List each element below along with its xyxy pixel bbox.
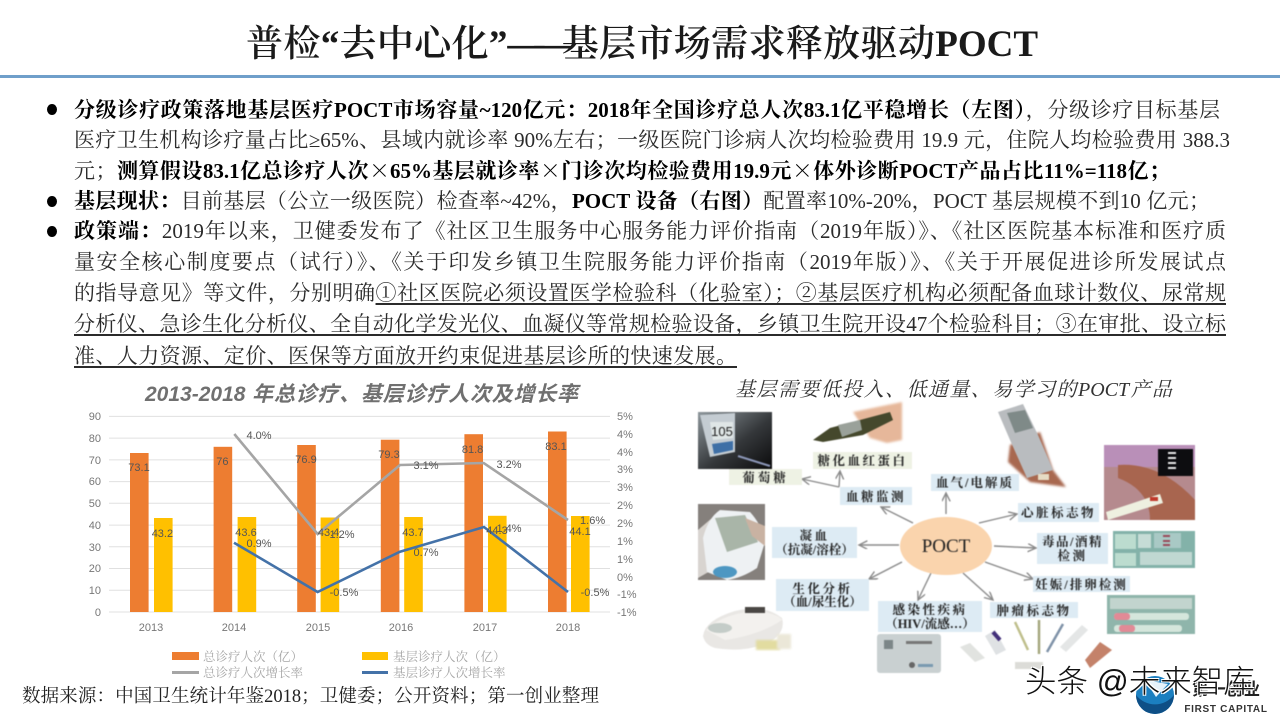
blue line: primary care growth rate: [234, 527, 568, 592]
left axis labels: 90: [89, 411, 101, 423]
photo: drug test strips: [1113, 531, 1195, 568]
photo: tumor marker strips: [960, 620, 1112, 669]
label: cardiac markers: [1018, 503, 1099, 522]
label: glucose: [729, 469, 802, 485]
left axis labels: [89, 411, 101, 619]
watermark: 头条 @未来智库: [1025, 663, 1255, 699]
bullet 1: [47, 104, 57, 115]
x axis labels: 2018: [556, 622, 580, 634]
diagram title: 基层需要低投入、低通量、易学习的POCT产品: [735, 379, 1172, 401]
left axis labels: 20: [89, 563, 101, 575]
photo: coagulation meter: [698, 504, 765, 580]
data labels: 76.9: [295, 454, 317, 466]
photo: infectious disease test card: [877, 634, 941, 673]
data labels: -0.5%: [330, 587, 359, 599]
right axis labels: 3%: [617, 482, 633, 494]
photo: blood gas analyzer: [998, 404, 1066, 487]
bullet 1 line 1: 分级诊疗政策落地基层医疗POCT市场容量~120亿元：2018年全国诊疗总人次83.1亿平稳增长（左图），分级诊疗目标基层: [74, 98, 1220, 122]
logo: First Capital: 第一创业: [1192, 675, 1260, 700]
bullet 3: [47, 226, 57, 237]
right axis labels: -1%: [617, 589, 637, 601]
data labels: 0.7%: [413, 547, 439, 559]
label: biochemistry: （血/尿生化）: [783, 594, 862, 609]
title rule: [0, 75, 1280, 78]
left axis labels: 80: [89, 433, 101, 445]
text block: policy bullets: [47, 98, 1230, 368]
data labels: 43.6: [235, 527, 257, 539]
x axis labels: 2015: [306, 622, 330, 634]
left axis labels: 50: [89, 498, 101, 510]
bullet 2: [47, 196, 57, 207]
hub: POCT oval: [900, 517, 992, 575]
data labels: 83.1: [545, 441, 567, 453]
data labels: 1.6%: [580, 515, 605, 527]
right axis labels: 2%: [617, 500, 633, 512]
yellow bars: primary care visits: [154, 516, 590, 612]
data labels: 73.1: [128, 462, 150, 474]
label: coagulation: [772, 527, 857, 558]
photo: glucose meter: 105: [711, 424, 733, 439]
data labels: -0.5%: [581, 587, 610, 599]
right axis labels: 5%: [617, 411, 633, 423]
data labels: 43.7: [402, 527, 424, 539]
x axis labels: 2014: [222, 622, 246, 634]
title: 普检“去中心化”——基层市场需求释放驱动POCT: [246, 24, 1038, 65]
chart legend: 总诊疗人次增长率: [203, 665, 304, 680]
x axis labels: 2016: [389, 622, 413, 634]
data labels: 3.2%: [496, 459, 522, 471]
photo: biochemistry analyzer: [703, 607, 791, 650]
arrows from POCT hub: [802, 471, 1036, 600]
photo: cardiac marker test: [1104, 445, 1195, 520]
chart title: 2013-2018 年总诊疗、基层诊疗人次及增长率: [145, 383, 578, 406]
data labels: 79.3: [378, 449, 400, 461]
label: HbA1c: 糖化血红蛋白: [817, 453, 908, 468]
data labels: 4.0%: [246, 430, 272, 442]
photo: glucose meter: [698, 412, 772, 469]
bullet 2 line: 基层现状：目前基层（公立一级医院）检查率~42%，POCT 设备（右图）配置率10%-20%，POCT 基层规模不到10 亿元；: [74, 189, 1210, 213]
right axis labels: 3%: [617, 464, 633, 476]
left axis labels: 0: [95, 607, 101, 619]
label: blood glucose monitoring: [840, 487, 912, 505]
right axis labels: 0%: [617, 572, 633, 584]
data labels: 44.1: [569, 526, 591, 538]
data labels: 81.8: [462, 444, 483, 456]
photo: HbA1c handheld: [813, 402, 902, 443]
chart legend: [172, 649, 506, 680]
right axis labels: 4%: [617, 429, 633, 441]
x axis labels: 2013: [139, 622, 163, 634]
right axis labels: 1%: [617, 536, 633, 548]
orange bars: total visits: [130, 432, 567, 612]
left axis labels: 70: [89, 455, 101, 467]
label: blood glucose monitoring: 血糖监测: [846, 489, 906, 504]
photo: pregnancy test: [1107, 595, 1195, 634]
right axis labels: 1%: [617, 554, 633, 566]
hub: POCT oval: POCT: [922, 536, 971, 557]
data source note: 数据来源：中国卫生统计年鉴2018；卫健委；公开资料；第一创业整理: [22, 687, 599, 707]
data labels: 43.4: [318, 527, 339, 539]
bullet 1 line 2: 医疗卫生机构诊疗量占比≥65%、县域内就诊率 90%左右；一级医院门诊病人次均检验费用 19.9 元，住院人均检验费用 388.3: [74, 128, 1230, 152]
label: biochemistry: 生化分析: [792, 581, 853, 596]
data labels: 0.9%: [246, 538, 272, 550]
chart legend: 基层诊疗人次增长率: [393, 665, 506, 680]
label: pregnancy and ovulation: 妊娠/排卵检测: [1035, 577, 1128, 592]
label: infectious disease: （HIV/流感…）: [885, 616, 975, 631]
label: coagulation: 凝血: [799, 528, 830, 543]
x axis labels: 2017: [473, 622, 497, 634]
chart legend: 基层诊疗人次（亿）: [393, 649, 506, 664]
logo: First Capital: FIRST CAPITAL: [1184, 704, 1268, 715]
bullet 3 line 3: 的指导意见》等文件，分别明确①社区医院必须设置医学检验科（化验室）；②基层医疗机构必须配备血球计数仪、尿常规: [74, 281, 1226, 305]
label: biochemistry: [776, 579, 869, 611]
label: tumor markers: 肿瘤标志物: [996, 603, 1072, 618]
x axis labels: [139, 622, 580, 634]
bullet 3 line 1: 政策端：2019年以来，卫健委发布了《社区卫生服务中心服务能力评价指南（2019年版）》、《社区医院基本标准和医疗质: [74, 219, 1226, 243]
label: drugs and alcohol: 检测: [1057, 548, 1088, 563]
data labels: [128, 430, 610, 599]
right axis labels: 4%: [617, 447, 633, 459]
data labels: 44.3: [486, 525, 508, 537]
left axis labels: 30: [89, 542, 101, 554]
right axis labels: [617, 411, 637, 619]
left axis labels: 60: [89, 476, 101, 488]
label: cardiac markers: 心脏标志物: [1021, 505, 1096, 520]
label: coagulation: （抗凝/溶栓）: [775, 542, 854, 557]
label: drugs and alcohol: 毒品/酒精: [1042, 534, 1103, 549]
gray line: total growth rate: [234, 434, 568, 534]
bullet 3 line 4: 分析仪、急诊生化分析仪、全自动化学发光仪、血凝仪等常规检验设备，乡镇卫生院开设47个检验科目；③在审批、设立标: [74, 312, 1226, 336]
chart legend: 总诊疗人次（亿）: [203, 649, 303, 664]
label: blood gas: 血气/电解质: [936, 475, 1014, 490]
data labels: 76: [216, 456, 229, 468]
right axis labels: 2%: [617, 518, 633, 530]
left axis labels: 10: [89, 585, 101, 597]
right axis labels: -1%: [617, 607, 637, 619]
label: drugs and alcohol: [1037, 533, 1108, 564]
data labels: 1.2%: [329, 529, 355, 541]
data labels: 3.1%: [413, 460, 439, 472]
bullet 3 line 2: 量安全核心制度要点（试行）》、《关于印发乡镇卫生院服务能力评价指南（2019年版）》、《关于开展促进诊所发展试点: [74, 250, 1226, 274]
bullet 3 line 5: 准、人力资源、定价、医保等方面放开约束促进基层诊所的快速发展。: [74, 344, 737, 368]
bullet 1 line 3: 元；测算假设83.1亿总诊疗人次×65%基层就诊率×门诊次均检验费用19.9元×体外诊断POCT产品占比11%=118亿；: [74, 155, 1170, 185]
data labels: 1.4%: [496, 523, 522, 535]
left axis labels: 40: [89, 520, 101, 532]
label: glucose: 葡萄糖: [742, 470, 789, 485]
data labels: 43.2: [152, 528, 173, 540]
label: infectious disease: [878, 601, 982, 632]
label: infectious disease: 感染性疾病: [892, 602, 968, 617]
